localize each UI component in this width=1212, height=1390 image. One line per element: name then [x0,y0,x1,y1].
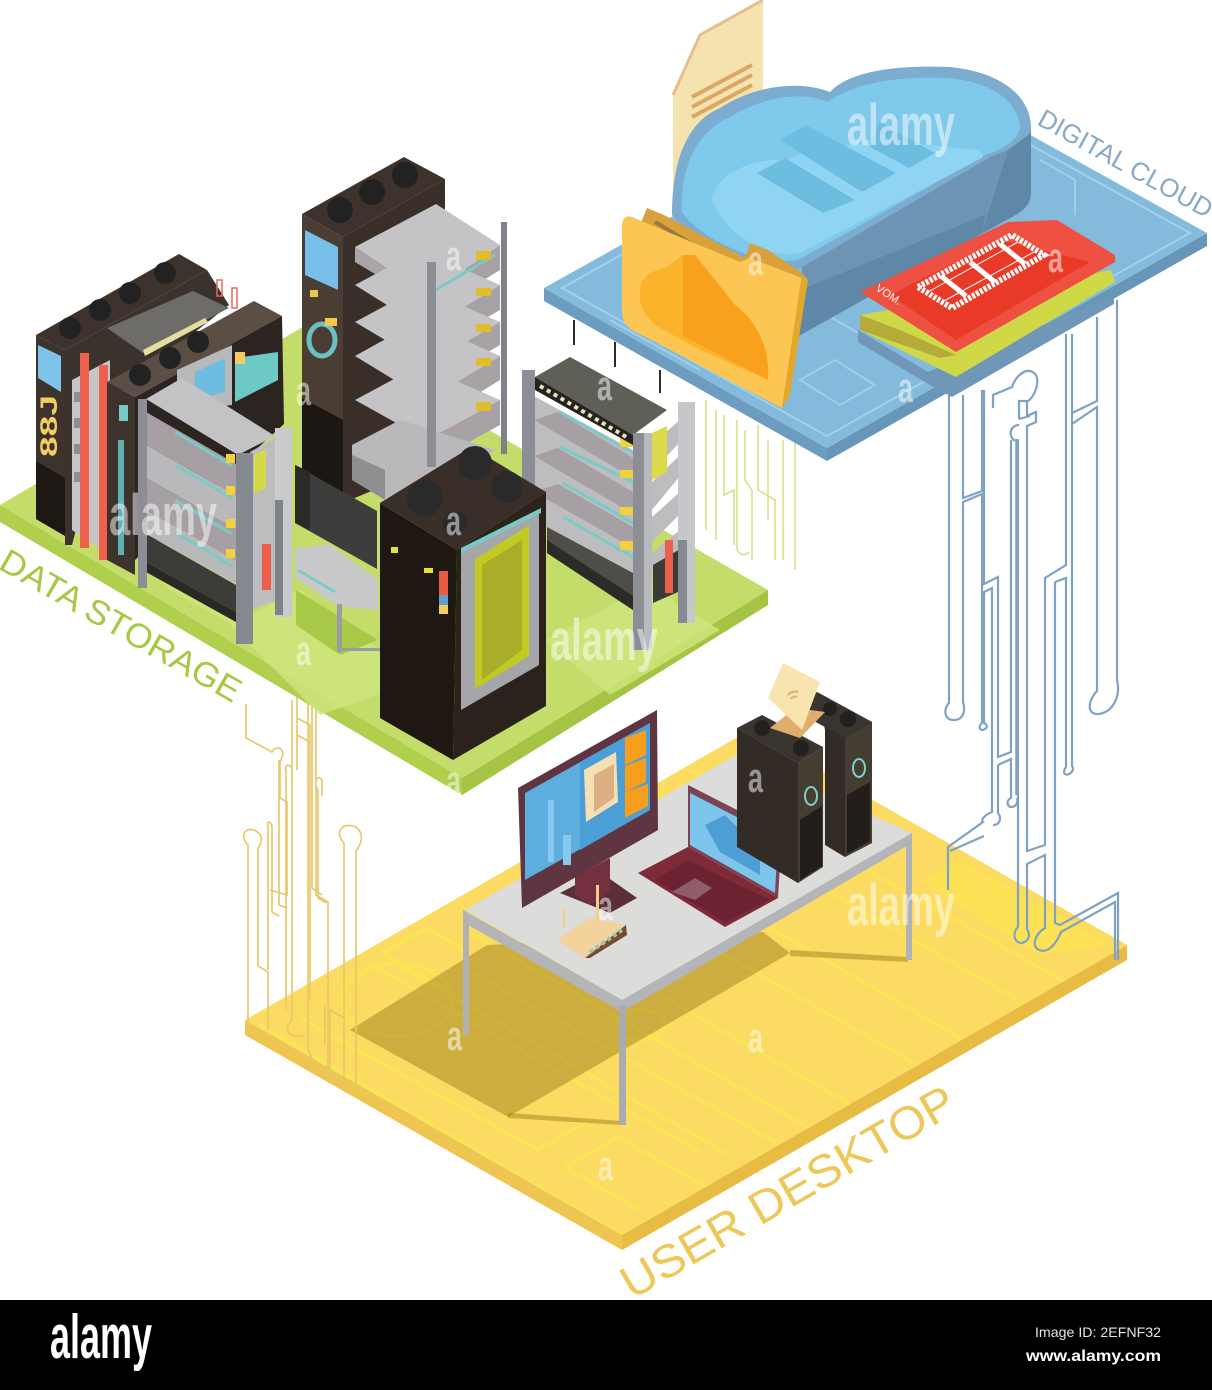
icon: wifi hotspot [768,663,825,738]
watermarks: a [748,1014,763,1061]
panel: digital cloud platform [544,76,1207,461]
server unit behind rack [107,301,284,575]
watermarks: a [446,232,461,279]
black cabinet [380,446,546,760]
footer bar [0,1300,1212,1390]
watermarks: a [446,757,461,804]
laptop [638,785,782,927]
footer bar: Image ID: 2EFNF32 [1035,1324,1161,1340]
icon: media cards [860,220,1115,377]
icon: cloud [672,67,1031,337]
watermarks: a [748,237,763,284]
watermarks: alamy [109,483,217,548]
label: data storage: DATA STORAGE [0,542,248,710]
panel: data storage platform [0,325,768,795]
watermarks: alamy [550,608,658,673]
tall server with shelves [302,157,507,503]
watermarks: a [598,1142,613,1189]
desk with monitor and keyboard [295,465,380,652]
rack with router [522,320,695,650]
server stack far left: 88J [36,395,63,457]
watermarks: a [446,497,461,544]
server stack far left [36,254,237,560]
watermarks: a [296,627,311,674]
desk shadow on platform [350,932,908,1125]
watermarks: a [748,754,763,801]
router [557,885,627,958]
raised plate under media cards [858,296,1114,397]
watermarks: alamy [847,93,955,158]
watermarks: alamy [847,873,955,938]
watermarks: a [597,362,612,409]
label: user desktop: USER DESKTOP [611,1075,964,1309]
wires: blue, cloud to desktop [945,300,1118,960]
rack with shelves [138,345,292,644]
watermarks: a [898,364,913,411]
watermarks: a [447,1012,462,1059]
wires: yellow, storage to desktop [244,688,361,1090]
icon: folder [622,208,808,408]
icon: document [673,0,763,205]
watermarks: a [296,367,311,414]
computer towers [737,692,872,883]
watermarks [109,93,1063,1189]
desk [463,755,912,1125]
footer bar: www.alamy.com [1025,1348,1161,1365]
footer bar: alamy [50,1303,152,1372]
watermarks: a [1048,234,1063,281]
wires: green, folder to data storage [706,400,795,570]
card label: VOM. [873,282,903,308]
panel: user desktop platform [245,730,1150,1250]
monitor [518,710,658,913]
icon: film strip [918,235,1044,308]
watermarks: a [598,882,613,929]
